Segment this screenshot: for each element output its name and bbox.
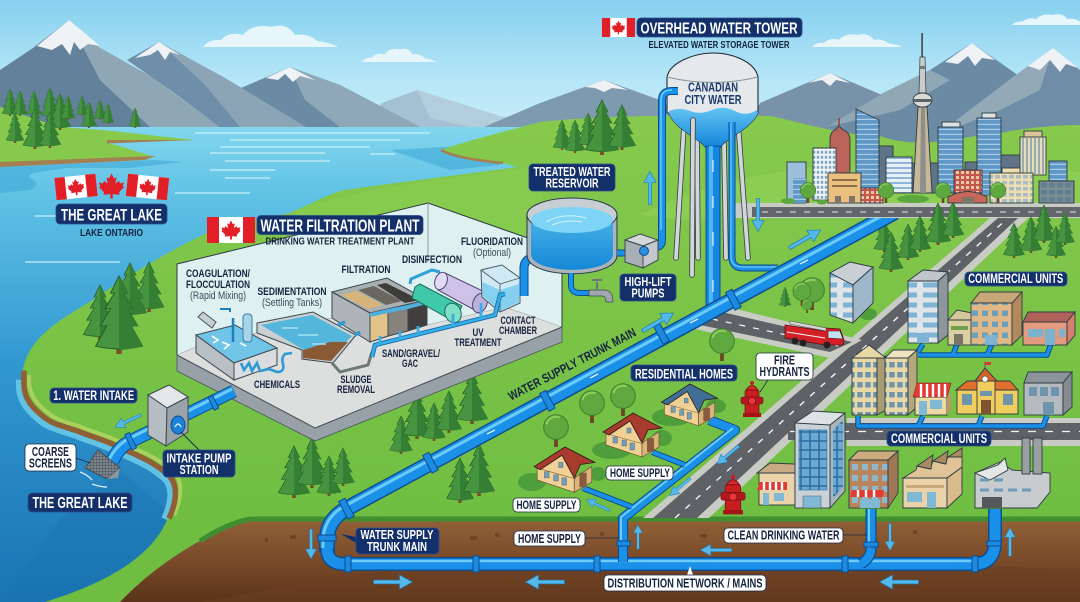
land (22, 116, 1080, 602)
lower commercial lines (858, 416, 1047, 426)
process labels: UV (472, 327, 484, 339)
commercial branch (861, 509, 871, 564)
shallow water along shore (22, 380, 173, 520)
sedimentation tank (257, 312, 356, 363)
main diagonal road (643, 218, 1028, 518)
trunk main pipe (323, 211, 895, 552)
CN tower (913, 33, 932, 193)
intake pipe to plant (185, 389, 234, 415)
filtration plant (177, 203, 562, 441)
label: high-lift pumps: HIGH-LIFT (624, 275, 672, 289)
water tower (652, 53, 778, 311)
top edge (177, 327, 562, 428)
label: high-lift pumps: PUMPS (632, 286, 664, 300)
small green shop (948, 310, 972, 345)
process labels: DISINFECTION (402, 254, 462, 266)
title: the great lake: THE GREAT LAKE (61, 206, 162, 224)
faucet (571, 273, 613, 302)
label: coarse screens: COARSE (32, 444, 69, 459)
chemical bottle (198, 312, 216, 328)
process pipe (372, 294, 505, 357)
hill behind plant lighter band (290, 168, 560, 240)
far left shore (0, 107, 195, 167)
label: treated water reservoir: TREATED WATER (534, 165, 610, 179)
disinfection loop pipe (410, 270, 440, 284)
home branch (621, 420, 735, 562)
floor (177, 307, 562, 428)
label: treated water reservoir: RESERVOIR (546, 177, 598, 191)
corner shop (757, 463, 795, 505)
lower road (788, 418, 1080, 446)
glass block (787, 162, 806, 203)
label: fire hydrants: FIRE (774, 352, 795, 367)
label: trunk main along pipe: WATER SUPPLY TRUNK MAIN (506, 325, 638, 403)
process labels: GAC (402, 358, 418, 370)
skyline trees (781, 183, 1006, 204)
coarse screen (80, 450, 120, 487)
process labels: FLUORIDATION (461, 236, 523, 248)
label: the great lake lower (28, 493, 132, 512)
process labels: (Rapid Mixing) (190, 290, 246, 302)
filter box (332, 278, 427, 342)
contact chamber (481, 265, 520, 312)
white block (886, 157, 912, 193)
background blocks (879, 146, 1021, 193)
plant title: WATER FILTRATION PLANT (260, 216, 420, 236)
salmon shop (1023, 312, 1075, 345)
title: overhead water tower (602, 18, 802, 51)
chemical cylinder (220, 309, 252, 342)
process labels: (Settling Tanks) (262, 297, 322, 309)
label: distribution network: DISTRIBUTION NETWORK / MAINS (608, 576, 763, 591)
top road (735, 203, 1080, 218)
gray block (1039, 181, 1074, 203)
process labels: TREATMENT (454, 337, 502, 349)
roads (643, 203, 1080, 518)
school (956, 362, 1018, 414)
label: water supply trunk main: WATER SUPPLY (360, 527, 434, 542)
lighter meadow behind city (640, 162, 1080, 222)
white grid tower (813, 148, 836, 200)
cream tower (885, 350, 917, 415)
blue tower (938, 122, 963, 193)
tan block (828, 173, 861, 203)
red tower (830, 118, 850, 173)
label: coarse screens: SCREENS (29, 455, 72, 470)
glass slanted tower (856, 109, 879, 188)
red hall (948, 170, 987, 203)
tank label: CANADIAN (688, 80, 738, 95)
label: intake pump station: STATION (180, 462, 218, 477)
title: the great lake (54, 174, 169, 239)
sludge pipe (332, 352, 372, 372)
fire truck (785, 321, 844, 348)
plant to reservoir pipe (524, 253, 547, 296)
label: water supply trunk main (341, 527, 439, 554)
distribution main pipe (327, 509, 995, 564)
filter feed stubs (338, 322, 360, 335)
sawtooth factory (903, 448, 962, 508)
house shrubs (518, 308, 877, 491)
label: intake pump station: INTAKE PUMP (166, 451, 232, 466)
house: red roof left (534, 447, 595, 492)
label: home supply middle: HOME SUPPLY (516, 498, 576, 512)
tan apartment (971, 292, 1022, 345)
apex line (427, 203, 429, 262)
house: red roof middle (603, 413, 662, 457)
label: intake pump station (163, 432, 235, 477)
commercial buildings middle row (852, 345, 1072, 415)
fire hydrants (721, 381, 763, 514)
house: blue roof (662, 384, 718, 426)
leg pipe (731, 122, 778, 268)
commercial buildings upper row (830, 262, 1075, 345)
clouds (203, 14, 1080, 62)
process labels (186, 236, 537, 396)
label: high-lift pumps (620, 274, 676, 301)
round trees (544, 278, 824, 447)
back legs (676, 122, 748, 258)
label: commercial units lower: COMMERCIAL UNITS (891, 431, 987, 446)
tank label (684, 80, 742, 107)
mountains left (0, 20, 540, 127)
label: home supply right (606, 466, 673, 480)
label: fire hydrants (756, 352, 813, 392)
tank (667, 53, 758, 148)
process labels: SEDIMENTATION (258, 286, 327, 298)
process labels: COAGULATION/ (186, 268, 250, 280)
upper commercial lines (918, 344, 1051, 355)
label: residential homes: RESIDENTIAL HOMES (635, 366, 733, 381)
striped tan tower (1020, 131, 1046, 175)
brick building (849, 451, 898, 508)
branch pipes (583, 344, 1051, 564)
disinfection cylinder (432, 270, 490, 315)
tank label: CITY WATER (684, 92, 742, 107)
back wall (177, 203, 562, 428)
process labels: CONTACT (500, 315, 536, 327)
label: fire hydrants: HYDRANTS (760, 364, 810, 379)
houses (534, 384, 718, 492)
side road (690, 305, 862, 358)
lake (0, 127, 560, 602)
city skyline (781, 33, 1074, 204)
process labels: CHEMICALS (254, 379, 300, 391)
sky background (0, 0, 1080, 135)
flow arrows (113, 172, 1015, 589)
glass tower (795, 411, 845, 508)
gray office (908, 270, 948, 343)
label: water intake: 1. WATER INTAKE (53, 388, 134, 403)
label: treated water reservoir (529, 164, 615, 191)
label: coarse screens (25, 444, 90, 471)
process labels: REMOVAL (337, 384, 375, 396)
chemical pipes (241, 353, 292, 372)
soil cross-section (120, 519, 1080, 602)
title: the great lake: LAKE ONTARIO (80, 227, 143, 239)
gray shop (1024, 372, 1072, 415)
title: overhead water tower: ELEVATED WATER STORAGE TOWER (648, 39, 790, 51)
process labels: SAND/GRAVEL/ (382, 348, 440, 360)
blue tall tower (977, 113, 1001, 195)
reservoir (527, 198, 617, 274)
striped shop (913, 383, 951, 415)
office near road (830, 262, 873, 323)
label: home supply lower: HOME SUPPLY (518, 532, 581, 546)
label: distribution network (604, 566, 766, 591)
plant title (207, 216, 423, 248)
reservoir to pump pipe (617, 250, 633, 256)
shoreline edge (24, 150, 503, 518)
intake pump station (148, 385, 188, 446)
label: the great lake lower: THE GREAT LAKE (32, 495, 128, 512)
house service lines (583, 452, 685, 507)
pipe couplings (318, 289, 1001, 572)
plant title: DRINKING WATER TREATMENT PLANT (266, 236, 415, 248)
riser pipe (652, 90, 678, 247)
label: home supply right: HOME SUPPLY (610, 466, 670, 480)
process labels: CHAMBER (499, 325, 537, 337)
high-lift pump (625, 234, 658, 268)
label: clean drinking water: CLEAN DRINKING WATER (728, 528, 840, 542)
process labels: SLUDGE (340, 374, 372, 386)
tan tower (852, 345, 886, 415)
front leg (692, 120, 693, 275)
cream block (990, 168, 1033, 203)
uv reactor (412, 284, 464, 325)
platform side (177, 327, 562, 441)
trees: pine clusters (2, 88, 1075, 503)
coagulation tank (196, 325, 277, 380)
process labels: (Optional) (473, 247, 511, 259)
process labels: FILTRATION (342, 264, 391, 276)
commercial buildings lower row (757, 411, 1050, 508)
blue low tower (1049, 161, 1067, 181)
label: residential homes (631, 365, 737, 381)
red low block (861, 188, 883, 203)
process labels: FLOCCULATION (186, 279, 250, 291)
title: overhead water tower: OVERHEAD WATER TOWER (640, 20, 798, 38)
mountains right (484, 43, 1080, 145)
label: water supply trunk main: TRUNK MAIN (367, 539, 427, 554)
gray factory (975, 438, 1050, 508)
water intake pipe (109, 419, 162, 462)
downpipe (706, 146, 720, 311)
